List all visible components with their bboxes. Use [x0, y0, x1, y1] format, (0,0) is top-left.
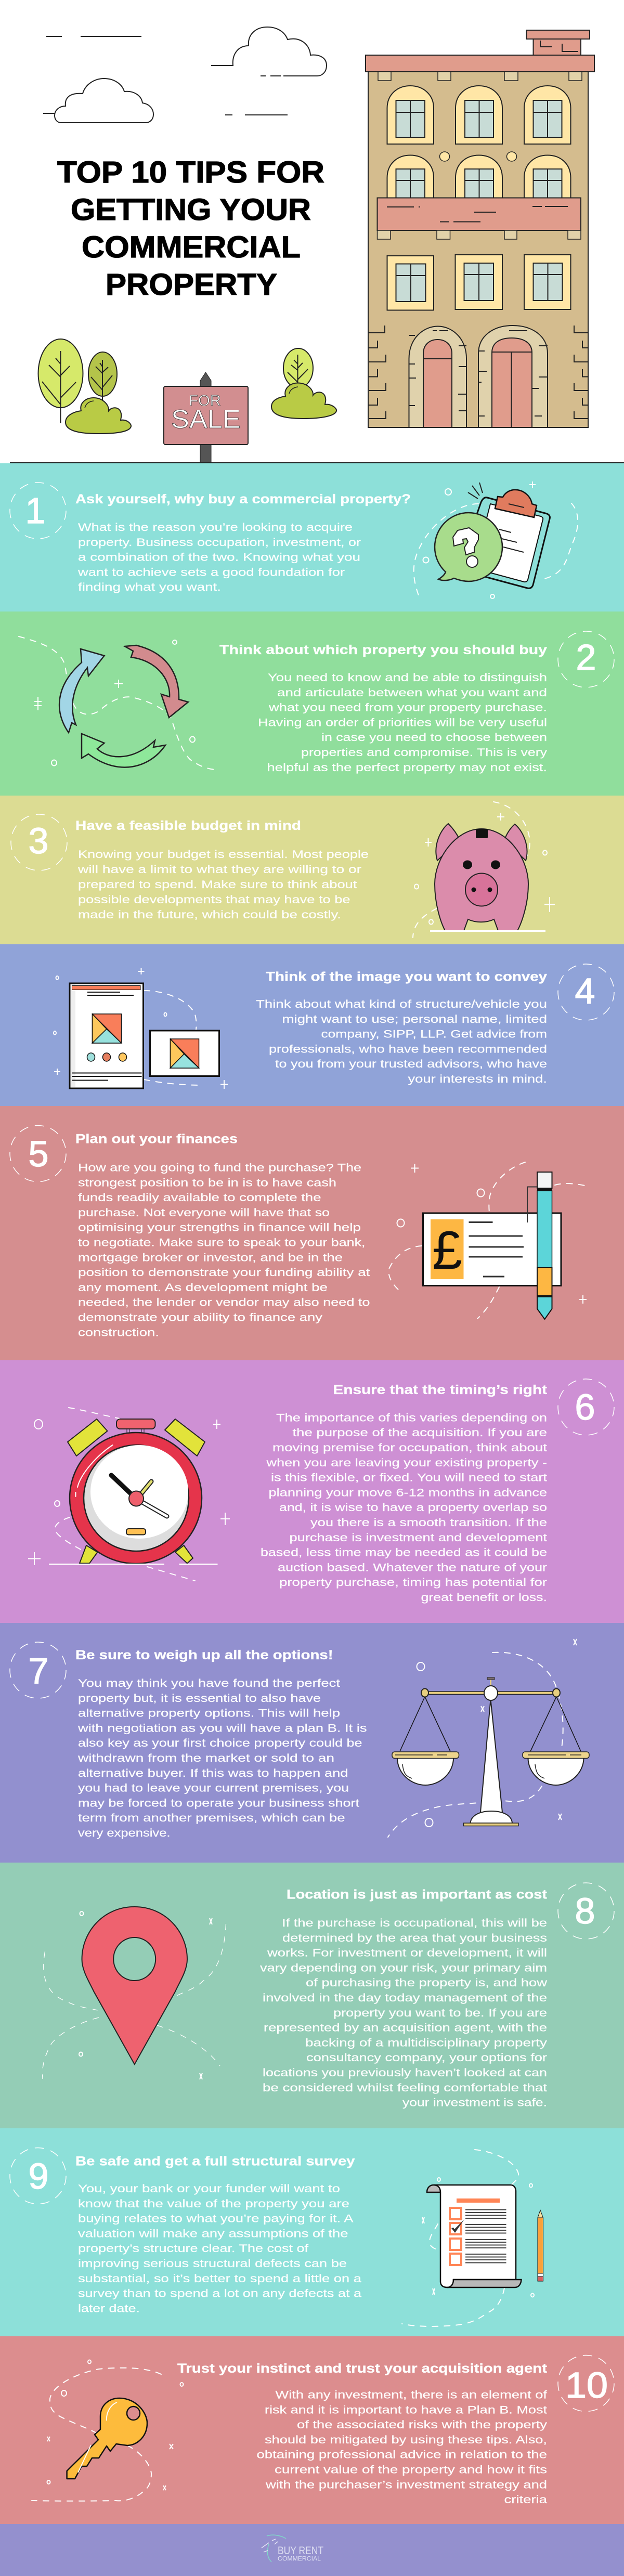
logo: Buy Rent Commercial: [262, 2535, 323, 2562]
body text: Having an order of priorities will be very useful: [258, 717, 547, 728]
panel: tip 6: [0, 1360, 624, 1623]
body text: also key as your first choice property could be: [78, 1737, 362, 1749]
number 4: [558, 964, 614, 1020]
number 8: 8: [575, 1891, 595, 1931]
heading: Think about which property you should buy: [219, 643, 547, 657]
body text: involved in the day today management of the: [263, 1992, 547, 2004]
body text: buying relates to what you’re paying for it. A: [78, 2213, 354, 2225]
body text: [78, 2183, 361, 2314]
body text: of purchasing the property is, and how: [306, 1977, 548, 1989]
body text: property purchase, timing has potential for: [279, 1577, 547, 1589]
body text: moving premise for occupation, think about: [272, 1442, 547, 1454]
title: TOP 10 TIPS FOR: [57, 155, 324, 189]
body text: be considered whilst feeling comfortable that: [263, 2082, 547, 2094]
body text: property you want to be. If you are: [333, 2007, 547, 2019]
number 5: 5: [29, 1134, 48, 1174]
icon: clipboard and question bubble: [414, 482, 578, 599]
body text: With any investment, there is an element of: [276, 2389, 547, 2401]
body text: How are you going to fund the purchase? The: [78, 1162, 361, 1174]
body text: [260, 1917, 548, 2109]
body text: optimising your strengths in finance will help: [78, 1222, 361, 1234]
icon: piggy bank: [413, 802, 555, 938]
title: COMMERCIAL: [82, 230, 301, 264]
body text: Think about what kind of structure/vehicle you: [256, 998, 547, 1010]
body text: later date.: [78, 2302, 140, 2314]
body text: [256, 998, 547, 1085]
body text: obtaining professional advice in relation to the: [257, 2449, 547, 2461]
body text: You need to know and be able to distinguish: [268, 672, 547, 684]
body text: prepared to spend. Make sure to think about: [78, 879, 357, 891]
number 10: 10: [565, 2365, 608, 2405]
body text: will have a limit to what they are willing to or: [77, 864, 361, 876]
heading: Ask yourself, why buy a commercial property?: [75, 492, 411, 506]
number 2: [558, 631, 614, 687]
balcony: [378, 198, 581, 239]
body text: any moment. As development might be: [78, 1282, 328, 1294]
heading: Location is just as important as cost: [287, 1888, 548, 1902]
body text: and, it is wise to have a property overlap so: [279, 1502, 547, 1514]
body text: your interests in mind.: [408, 1073, 547, 1085]
building: [366, 30, 594, 427]
panel: tip 9: [0, 2128, 624, 2336]
body text: [77, 849, 369, 921]
for sale sign: [164, 372, 248, 463]
body text: needed, the lender or vendor may also need to: [78, 1297, 370, 1309]
tree: right: [283, 348, 313, 388]
body text: [77, 522, 361, 593]
body text: properties and compromise. This is very: [301, 747, 548, 759]
number 5: [10, 1125, 66, 1181]
body text: professionals, who have been recommended: [269, 1043, 547, 1055]
body text: and articulate between what you want and: [277, 687, 547, 699]
body text: vary depending on your risk, your primary aim: [260, 1962, 547, 1974]
number 6: [558, 1379, 614, 1435]
body text: represented by an acquisition agent, with the: [264, 2022, 547, 2034]
icon: survey checklist and pencil: [402, 2150, 543, 2326]
body text: purchase. Not everyone will have that so: [78, 1207, 330, 1219]
body text: position to demonstrate your funding ability at: [78, 1267, 370, 1279]
body text: with negotiation as you will have a plan B. It is: [77, 1722, 367, 1734]
body text: alternative buyer. If this was to happen and: [78, 1767, 348, 1779]
body text: property’s structure clear. The cost of: [78, 2243, 308, 2255]
icon: cycle arrows: [19, 636, 217, 770]
body text: Knowing your budget is essential. Most people: [78, 849, 369, 861]
body text: possible developments that may have to be: [78, 894, 350, 906]
body text: purchase is investment and development: [289, 1532, 547, 1544]
icon: key: [32, 2360, 183, 2501]
title: PROPERTY: [106, 268, 277, 302]
title: GETTING YOUR: [71, 193, 311, 227]
body text: [258, 672, 548, 774]
body text: of the associated risks with the property: [297, 2419, 548, 2431]
heading: Be sure to weigh up all the options!: [75, 1648, 333, 1662]
body text: to negotiate. Make sure to speak to your bank,: [78, 1237, 365, 1249]
body text: to you from your trusted advisors, who have: [275, 1058, 547, 1070]
body text: may be forced to operate your business short: [78, 1797, 359, 1809]
body text: finding what you want.: [78, 581, 221, 593]
body text: property but, it is essential to also have: [78, 1693, 321, 1705]
number 8: [558, 1883, 614, 1939]
body text: consultancy company, your options for: [306, 2052, 547, 2064]
number 3: 3: [29, 821, 48, 861]
panel: tip 4: [0, 944, 624, 1106]
cloud: top centre: [211, 27, 327, 76]
body text: great benefit or loss.: [421, 1592, 547, 1604]
doors: [409, 326, 548, 427]
panel: tip 3: [0, 796, 624, 944]
logo: Buy Rent Commercial: COMMERCIAL: [278, 2555, 321, 2562]
heading: Be safe and get a full structural survey: [75, 2154, 355, 2168]
body text: should be mitigated by using these tips. Also,: [265, 2434, 547, 2446]
body text: strongest position to be in is to have cash: [78, 1177, 336, 1189]
title: [57, 155, 324, 302]
body text: What is the reason you’re looking to acquire: [78, 522, 353, 534]
number 6: 6: [575, 1387, 595, 1427]
body text: current value of the property and how it fits: [275, 2464, 547, 2476]
tree: small left: [88, 352, 117, 400]
number 2: 2: [576, 637, 596, 678]
body text: locations you previously haven’t looked at can: [263, 2067, 547, 2079]
heading: Trust your instinct and trust your acquisition agent: [177, 2361, 548, 2376]
body text: want to achieve sets a good foundation for: [77, 566, 345, 578]
body text: term from another premises, which can be: [78, 1812, 345, 1824]
heading: Have a feasible budget in mind: [75, 818, 301, 833]
tree: large left: [38, 339, 83, 423]
number 7: [10, 1642, 66, 1698]
number 7: 7: [29, 1650, 48, 1691]
body text: when you are leaving your existing property -: [266, 1457, 547, 1469]
bush: right: [271, 383, 336, 419]
body text: backing of a multidisciplinary property: [305, 2037, 548, 2049]
body text: improving serious structural defects can be: [78, 2258, 347, 2270]
icon: cheque and pen: [388, 1162, 587, 1319]
heading: Think of the image you want to convey: [266, 969, 547, 984]
logo: Buy Rent Commercial: BUY RENT: [278, 2545, 323, 2557]
body text: your investment is safe.: [402, 2097, 547, 2109]
number 1: 1: [25, 490, 45, 531]
body text: You may think you have found the perfect: [78, 1677, 340, 1689]
body text: you had to leave your current premises, you: [78, 1783, 349, 1794]
body text: auction based. Whatever the nature of your: [278, 1562, 547, 1573]
body text: If the purchase is occupational, this will be: [282, 1917, 547, 1929]
windows: middle row: [387, 152, 571, 198]
quoins: [368, 326, 588, 419]
body text: [78, 1162, 370, 1338]
number 9: [10, 2148, 66, 2204]
body text: mortgage broker or investor, and be in the: [78, 1252, 343, 1264]
body text: with the purchaser’s investment strategy and: [265, 2479, 547, 2491]
sky dashes: [46, 36, 288, 115]
icon: location pin: [43, 1907, 226, 2079]
panel: tip 8: [0, 1863, 624, 2128]
body text: You, your bank or your funder will want to: [78, 2183, 340, 2195]
heading: Plan out your finances: [75, 1131, 238, 1146]
body text: property. Business occupation, investment, or: [78, 537, 361, 549]
body text: the purpose of the acquisition. If you are: [292, 1427, 547, 1439]
body text: very expensive.: [78, 1827, 171, 1839]
number 4: 4: [575, 971, 595, 1011]
body text: is this flexible, or fixed. You will need to start: [271, 1472, 547, 1484]
windows: lower row: [387, 255, 571, 310]
for sale sign: FOR: [189, 393, 221, 409]
body text: alternative property options. This will help: [78, 1708, 340, 1720]
footer: [0, 2524, 624, 2576]
body text: planning your move 6-12 months in advance: [268, 1487, 547, 1499]
icon: documents: [54, 968, 228, 1089]
bush: left: [66, 398, 131, 434]
icon: alarm clock: [28, 1408, 230, 1581]
body text: [261, 1412, 547, 1604]
body text: works. For investment or development, it will: [267, 1947, 547, 1959]
panel: tip 10: [0, 2336, 624, 2524]
body text: withdrawn from the market or sold to an: [77, 1752, 334, 1764]
body text: criteria: [504, 2494, 547, 2506]
body text: helpful as the perfect property may not exist.: [267, 762, 547, 774]
number 1: [10, 483, 66, 539]
body text: construction.: [78, 1326, 159, 1338]
body text: what you need from your property purchase.: [268, 702, 547, 714]
body text: know that the value of the property you are: [78, 2198, 349, 2210]
panel: tip 5: [0, 1106, 624, 1360]
number 10: [558, 2356, 614, 2412]
cloud: left: [43, 79, 153, 123]
body text: you there is a smooth transition. If the: [310, 1517, 547, 1529]
body text: substantial, so it’s better to spend a little on a: [78, 2273, 361, 2285]
body text: determined by the area that your business: [282, 1932, 547, 1944]
number 9: 9: [29, 2156, 48, 2196]
panel: tip 2: [0, 612, 624, 796]
body text: [257, 2389, 548, 2506]
body text: might want to use; personal name, limited: [282, 1013, 547, 1025]
body text: funds readily available to complete the: [78, 1192, 321, 1204]
heading: Ensure that the timing’s right: [333, 1383, 548, 1397]
body text: made in the future, which could be costly.: [78, 909, 341, 921]
body text: based, less time may be needed as it could be: [261, 1547, 547, 1559]
icon: cheque and pen: £: [432, 1220, 462, 1281]
body text: a combination of the two. Knowing what you: [78, 552, 360, 564]
body text: risk and it is important to have a Plan B. Most: [265, 2404, 547, 2416]
windows: top row: [387, 86, 571, 144]
number 3: [11, 814, 67, 870]
body text: company, SIPP, LLP. Get advice from: [321, 1029, 547, 1040]
ground line: [10, 462, 624, 463]
icon: balance scales: [388, 1639, 589, 1837]
body text: in case you need to choose between: [321, 732, 547, 744]
body text: The importance of this varies depending on: [276, 1412, 547, 1424]
body text: [77, 1677, 367, 1839]
panel: tip 7: [0, 1623, 624, 1863]
for sale sign: SALE: [171, 405, 241, 434]
body text: valuation will make any assumptions of the: [78, 2228, 348, 2240]
body text: demonstrate your ability to finance any: [78, 1311, 323, 1324]
body text: survey than to spend a lot on any defects at a: [78, 2288, 361, 2300]
panel: tip 1: [0, 463, 624, 612]
